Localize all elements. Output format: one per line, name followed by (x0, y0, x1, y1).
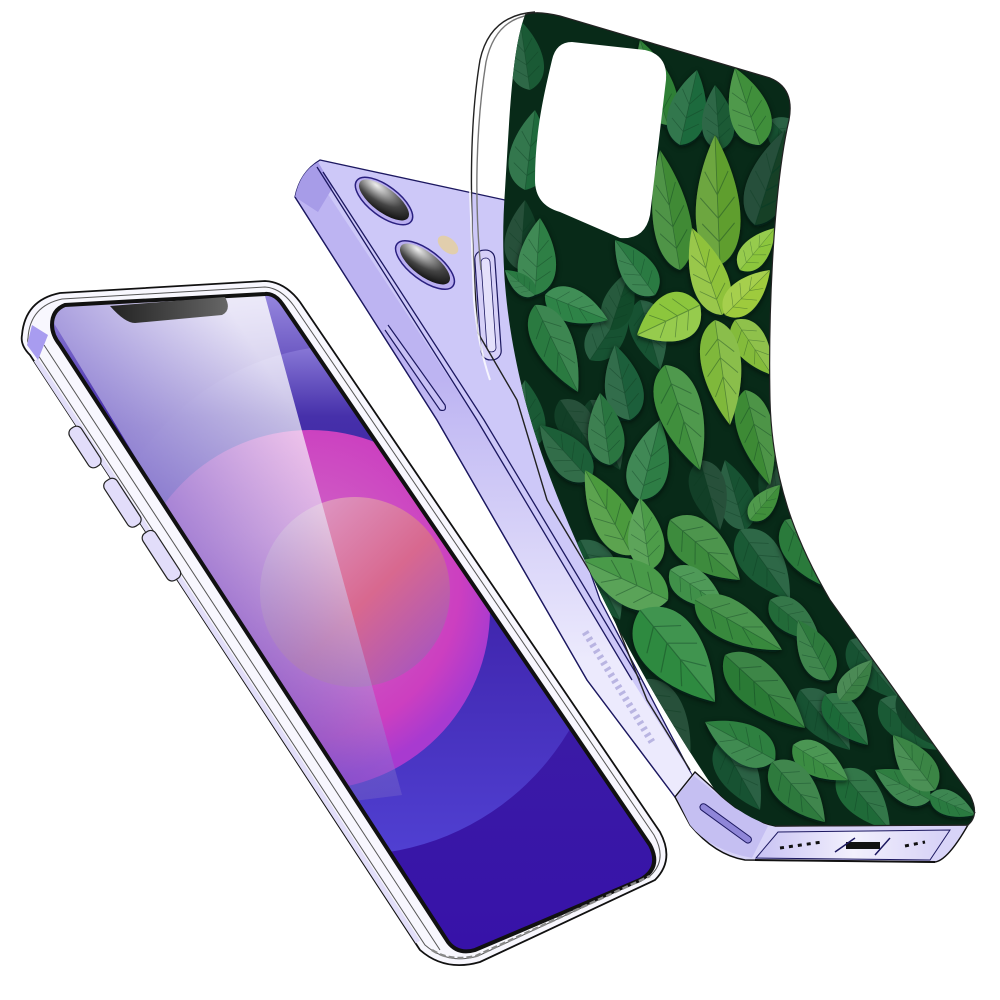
port area (756, 830, 950, 860)
speaker slot (699, 802, 753, 844)
bottom corner detail (432, 876, 650, 958)
screen bezel (52, 294, 654, 951)
panel: back phone body (295, 160, 693, 797)
side button (474, 249, 502, 361)
bright central rosette leaves (635, 135, 776, 488)
icon: camera lens lower (388, 232, 462, 298)
engraved marks on side (585, 632, 652, 742)
background leaves (503, 18, 965, 842)
panel: front phone (22, 280, 680, 965)
notch (110, 297, 228, 323)
icon: camera lens upper (348, 169, 420, 233)
mid green leaves (499, 34, 980, 835)
clear case frame (22, 281, 666, 965)
icon: flash (434, 232, 462, 258)
panel: case bottom with ports (675, 772, 975, 862)
camera cutout (535, 42, 666, 238)
screen protector glare (40, 285, 402, 802)
side buttons (67, 424, 183, 583)
clear case outline (470, 12, 690, 770)
screen (54, 296, 652, 950)
panel: green leaf case (490, 0, 990, 842)
case outline (525, 13, 975, 826)
